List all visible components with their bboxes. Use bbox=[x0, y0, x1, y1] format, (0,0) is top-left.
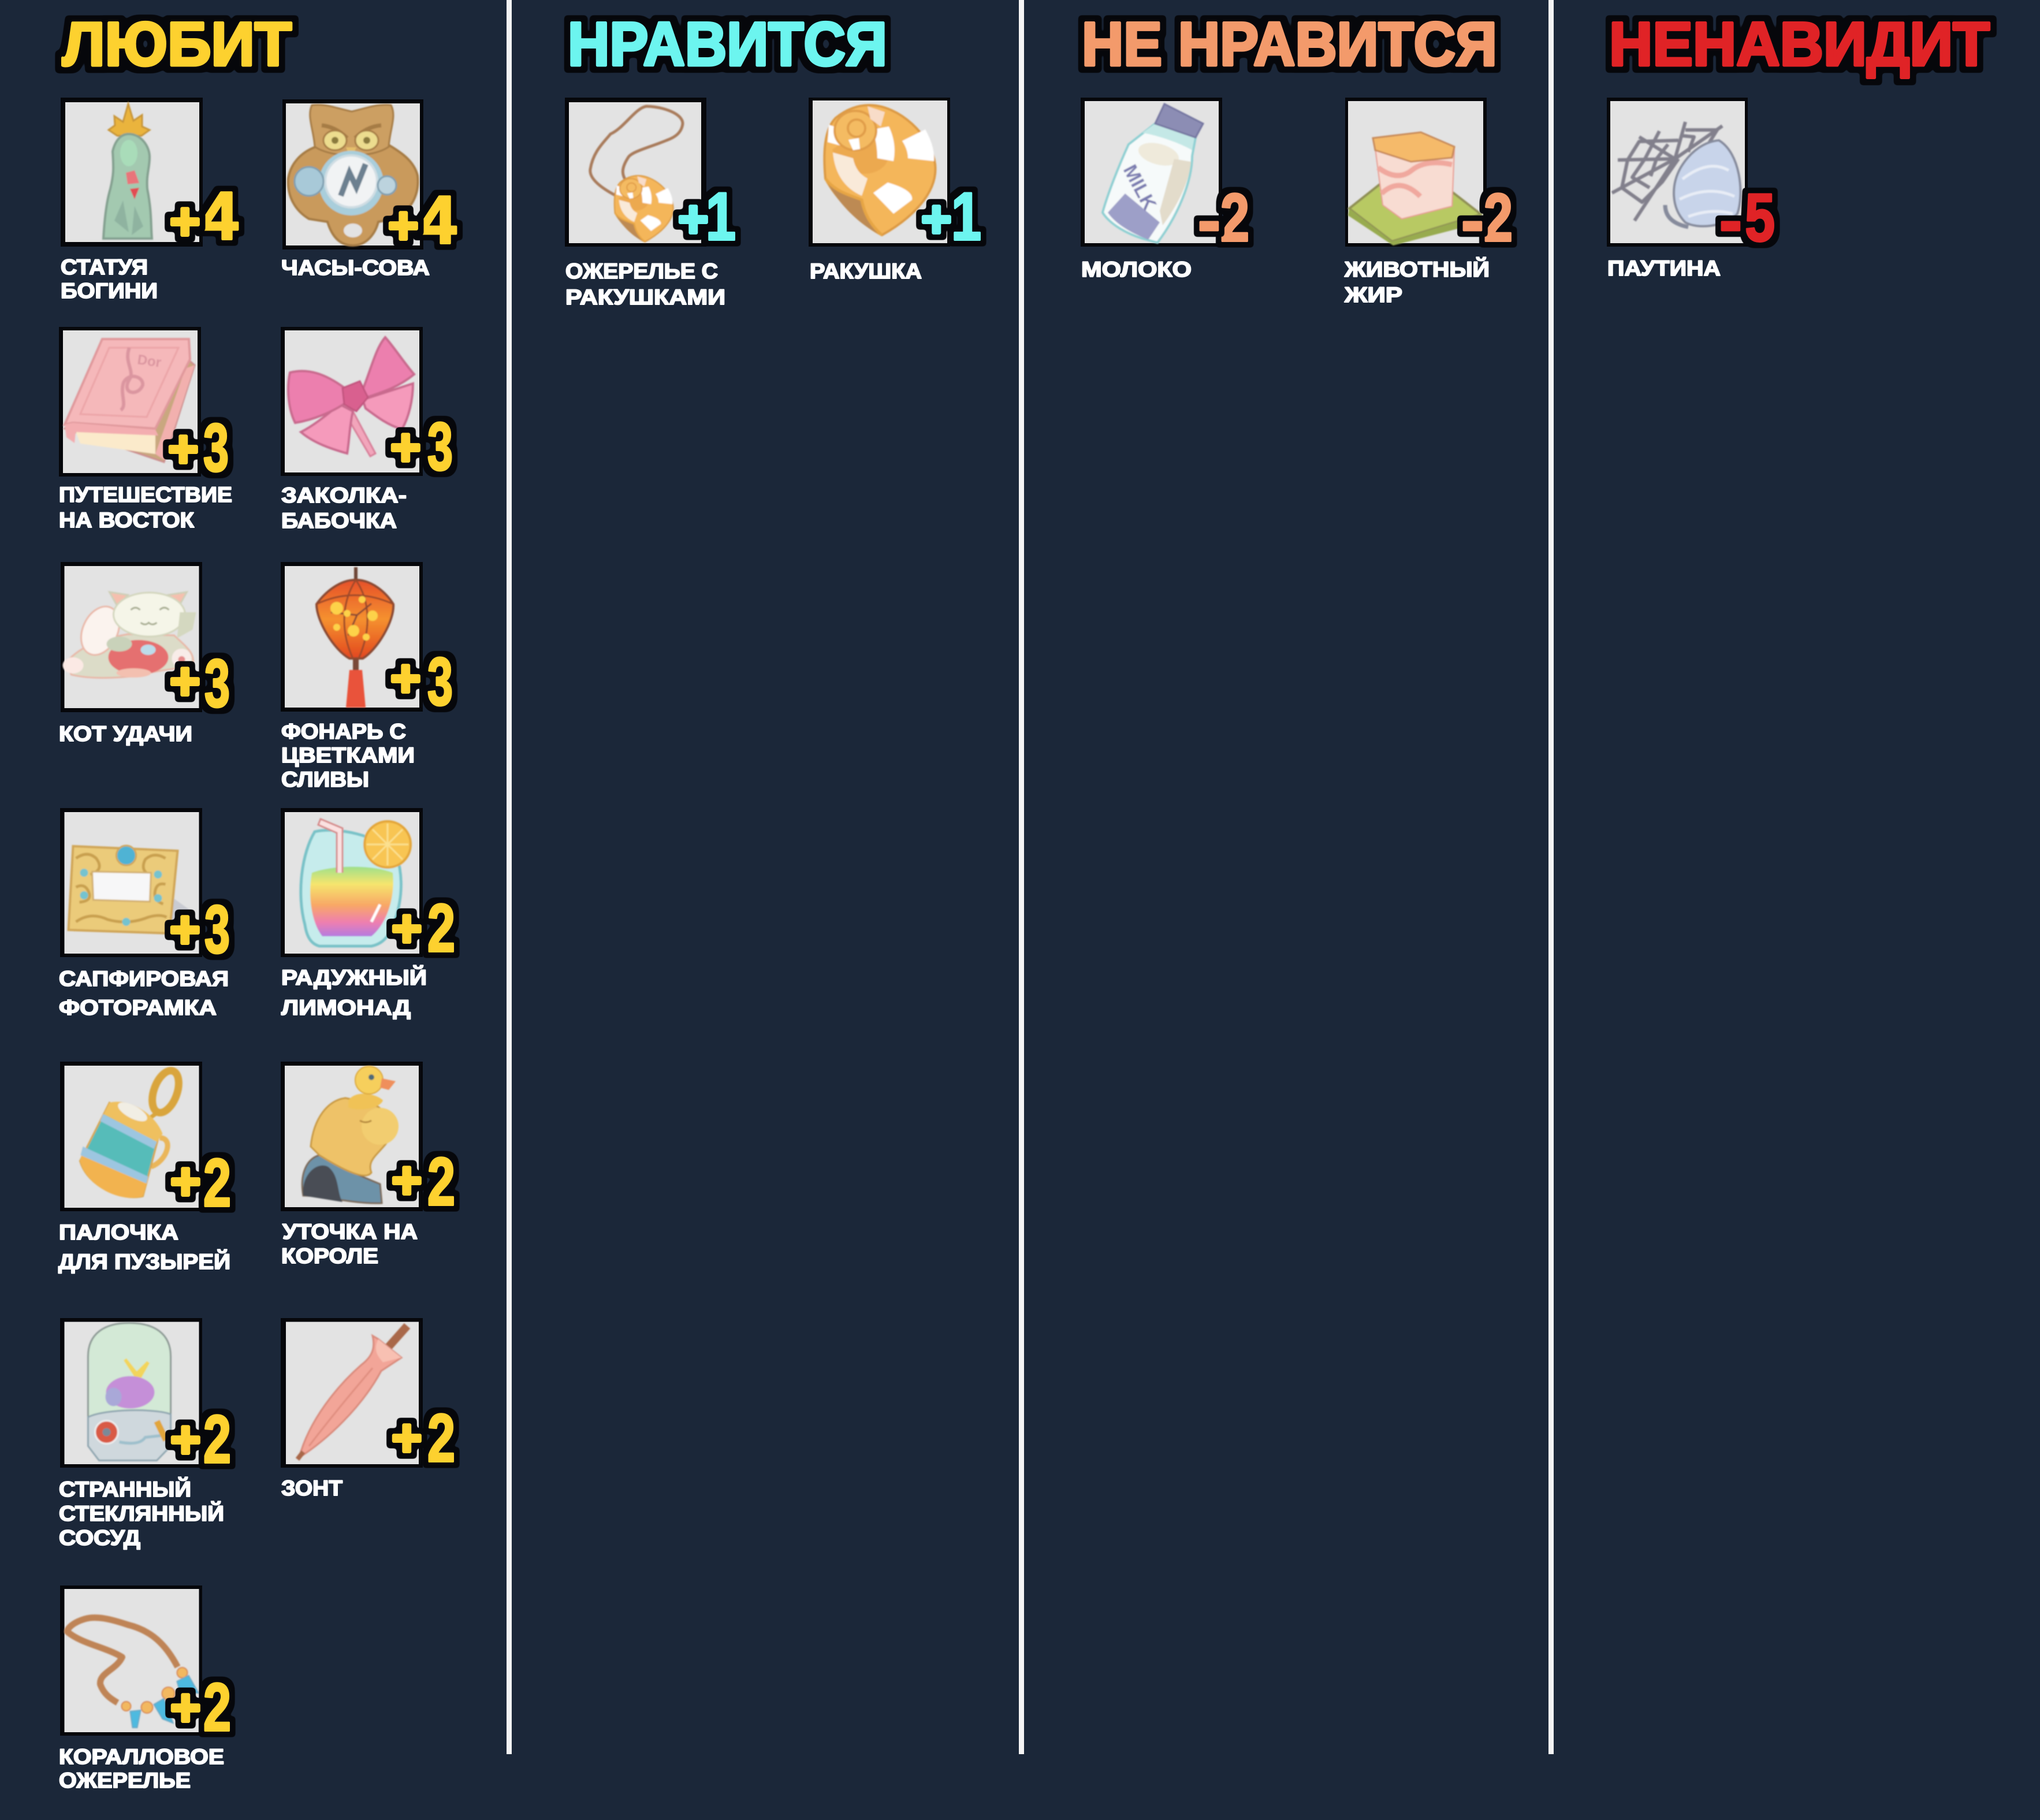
item: молоко bbox=[1081, 98, 1249, 281]
badge: +2 bbox=[392, 890, 455, 966]
icon: statue bbox=[103, 104, 152, 239]
label: ЖИВОТНЫЙ bbox=[1344, 257, 1490, 281]
icon: shell bbox=[824, 105, 936, 235]
badge: +1 bbox=[678, 178, 736, 254]
badge: +2: + bbox=[170, 1411, 201, 1469]
badge: -5: - bbox=[1719, 183, 1742, 258]
icon: owl clock bbox=[288, 105, 418, 245]
label bbox=[281, 965, 427, 1019]
label bbox=[281, 483, 407, 533]
badge: +2: + bbox=[392, 1409, 422, 1467]
item: ракушка bbox=[809, 98, 981, 283]
badge: +2: + bbox=[392, 1152, 422, 1209]
icon: golden frame bbox=[68, 846, 191, 933]
label: ДЛЯ ПУЗЫРЕЙ bbox=[58, 1249, 230, 1274]
label: НА ВОСТОК bbox=[59, 508, 194, 532]
badge: +3: 3 bbox=[204, 645, 230, 721]
badge: +3: + bbox=[170, 653, 200, 710]
label: РАДУЖНЫЙ bbox=[281, 965, 427, 989]
label: РАКУШКА bbox=[810, 259, 922, 283]
label bbox=[58, 1220, 230, 1274]
icon: spider web and cocoon bbox=[1612, 122, 1740, 227]
label: БАБОЧКА bbox=[281, 509, 397, 533]
icon: animal fat bbox=[1348, 132, 1482, 245]
badge: +3: 3 bbox=[204, 891, 230, 967]
icon: milk bottle: MILK bbox=[1119, 161, 1161, 214]
item: радужный лимонад bbox=[281, 808, 455, 1019]
label: ПАЛОЧКА bbox=[59, 1220, 178, 1244]
panel: ненавидит bbox=[1607, 9, 1990, 280]
badge: -2: 2 bbox=[1484, 180, 1513, 255]
badge: -2 bbox=[1198, 180, 1249, 258]
icon: glass jar bbox=[88, 1323, 171, 1460]
label: ЗАКОЛКА- bbox=[281, 483, 407, 507]
badge: +2: 2 bbox=[203, 1145, 231, 1220]
badge: +1: + bbox=[921, 191, 952, 248]
label: ЧАСЫ-СОВА bbox=[281, 256, 430, 280]
badge: +3: + bbox=[390, 650, 421, 708]
heading: ненавидит: НЕНАВИДИТ bbox=[1609, 9, 1990, 79]
badge: +3 bbox=[168, 410, 229, 485]
label: КОТ УДАЧИ bbox=[59, 722, 192, 746]
item: статуя богини bbox=[61, 98, 238, 303]
badge: +2 bbox=[392, 1144, 455, 1219]
label: СТЕКЛЯННЫЙ bbox=[59, 1501, 224, 1525]
icon: milk bottle bbox=[1103, 104, 1203, 243]
label: ЦВЕТКАМИ bbox=[281, 743, 415, 767]
panel: не нравится bbox=[1081, 9, 1513, 307]
badge: +2 bbox=[170, 1669, 231, 1745]
item: уточка на короле bbox=[281, 1062, 455, 1268]
label: РАКУШКАМИ bbox=[565, 285, 725, 309]
item: ожерелье с ракушками bbox=[565, 98, 736, 309]
label: ПУТЕШЕСТВИЕ bbox=[59, 483, 232, 507]
badge: +4: + bbox=[388, 197, 419, 255]
badge: +3 bbox=[170, 645, 230, 721]
label: ПАУТИНА bbox=[1607, 256, 1721, 280]
item: странный стеклянный сосуд bbox=[59, 1318, 231, 1550]
icon: shell necklace bbox=[590, 106, 683, 242]
label: СТРАННЫЙ bbox=[59, 1477, 191, 1501]
label: ОЖЕРЕЛЬЕ bbox=[59, 1769, 191, 1792]
badge: +2: 2 bbox=[427, 890, 455, 966]
badge: -2: - bbox=[1461, 183, 1484, 258]
icon: rainbow lemonade bbox=[301, 819, 411, 946]
item: сапфировая фоторамка bbox=[59, 808, 230, 1019]
item: палочка для пузырей bbox=[58, 1062, 231, 1274]
badge: +2 bbox=[170, 1145, 231, 1220]
panel: любит bbox=[58, 9, 456, 1792]
badge: +3 bbox=[390, 643, 453, 719]
label: СТАТУЯ bbox=[61, 255, 148, 279]
badge: +2: 2 bbox=[427, 1144, 455, 1219]
badge: -2: - bbox=[1198, 183, 1220, 258]
label: ЗОНТ bbox=[281, 1476, 343, 1500]
label: КОРОЛЕ bbox=[281, 1244, 378, 1268]
badge: +2 bbox=[392, 1400, 455, 1476]
label bbox=[59, 1477, 224, 1550]
label bbox=[59, 1745, 224, 1792]
badge: +4 bbox=[388, 182, 456, 258]
label: МОЛОКО bbox=[1081, 258, 1192, 281]
badge: -2 bbox=[1461, 180, 1513, 258]
label bbox=[281, 720, 415, 791]
icon: lantern bbox=[317, 567, 393, 708]
badge: +3: + bbox=[168, 420, 199, 478]
label: ЖИР bbox=[1344, 283, 1402, 307]
badge: +1: + bbox=[678, 191, 709, 248]
icon: pink book bbox=[65, 339, 195, 462]
label: УТОЧКА НА bbox=[282, 1220, 418, 1244]
panel: нравится bbox=[565, 9, 981, 309]
item: коралловое ожерелье bbox=[59, 1585, 231, 1792]
icon: lucky cat bbox=[62, 592, 196, 678]
label: СОСУД bbox=[59, 1526, 140, 1550]
badge: +2: + bbox=[170, 1153, 201, 1211]
badge: +4: 4 bbox=[200, 178, 238, 254]
badge: +3: + bbox=[390, 419, 421, 477]
badge: +3: 3 bbox=[203, 410, 229, 485]
heading: не нравится: НЕ НРАВИТСЯ bbox=[1082, 9, 1497, 79]
label: ЛИМОНАД bbox=[281, 996, 411, 1019]
item: путешествие на восток bbox=[59, 327, 232, 532]
item: часы-сова bbox=[281, 99, 456, 280]
icon: duck on king bust bbox=[302, 1066, 399, 1203]
label: ФОНАРЬ С bbox=[281, 720, 406, 743]
label: КОРАЛЛОВОЕ bbox=[59, 1745, 224, 1769]
badge: -2: 2 bbox=[1220, 180, 1249, 255]
badge: +2 bbox=[170, 1401, 231, 1477]
badge: +1: 1 bbox=[951, 178, 981, 254]
label bbox=[59, 967, 229, 1019]
label: СЛИВЫ bbox=[281, 768, 369, 791]
item: фонарь с цветками сливы bbox=[281, 562, 453, 791]
label: САПФИРОВАЯ bbox=[59, 967, 229, 991]
badge: +4: 4 bbox=[419, 182, 456, 258]
item: кот удачи bbox=[59, 562, 230, 746]
badge: +2: 2 bbox=[203, 1669, 231, 1745]
badge: +1 bbox=[921, 178, 981, 254]
badge: +3 bbox=[170, 891, 230, 967]
badge: +4: + bbox=[170, 193, 200, 251]
item: паутина bbox=[1607, 98, 1775, 280]
icon: coral necklace bbox=[67, 1618, 199, 1728]
item: зонт bbox=[281, 1318, 455, 1500]
heading: любит: ЛЮБИТ bbox=[62, 9, 292, 79]
badge: +3: 3 bbox=[427, 408, 453, 484]
item: заколка-бабочка bbox=[281, 327, 453, 533]
badge: +1: 1 bbox=[706, 178, 736, 254]
badge: +3: 3 bbox=[427, 643, 453, 719]
label bbox=[281, 1220, 418, 1268]
label bbox=[59, 483, 232, 532]
label bbox=[565, 259, 725, 309]
icon: pink book: Dor bbox=[136, 352, 162, 371]
label: БОГИНИ bbox=[61, 279, 158, 303]
badge: +3: + bbox=[170, 901, 200, 959]
badge: +2: + bbox=[170, 1679, 201, 1737]
badge: +4 bbox=[170, 178, 238, 254]
icon: pink bow bbox=[288, 337, 414, 456]
label bbox=[1344, 257, 1490, 307]
label bbox=[61, 255, 158, 303]
icon: umbrella bbox=[297, 1326, 407, 1459]
badge: -5 bbox=[1719, 180, 1775, 258]
badge: +2: 2 bbox=[203, 1401, 231, 1477]
badge: +3 bbox=[390, 408, 453, 484]
badge: -5: 5 bbox=[1745, 180, 1775, 255]
label: ОЖЕРЕЛЬЕ С bbox=[565, 259, 718, 283]
heading: нравится: НРАВИТСЯ bbox=[568, 9, 887, 79]
icon: bubble wand bbox=[80, 1067, 184, 1198]
item: животный жир bbox=[1344, 98, 1513, 307]
badge: +2: 2 bbox=[427, 1400, 455, 1476]
badge: +2: + bbox=[392, 900, 422, 958]
label: ФОТОРАМКА bbox=[59, 996, 217, 1019]
